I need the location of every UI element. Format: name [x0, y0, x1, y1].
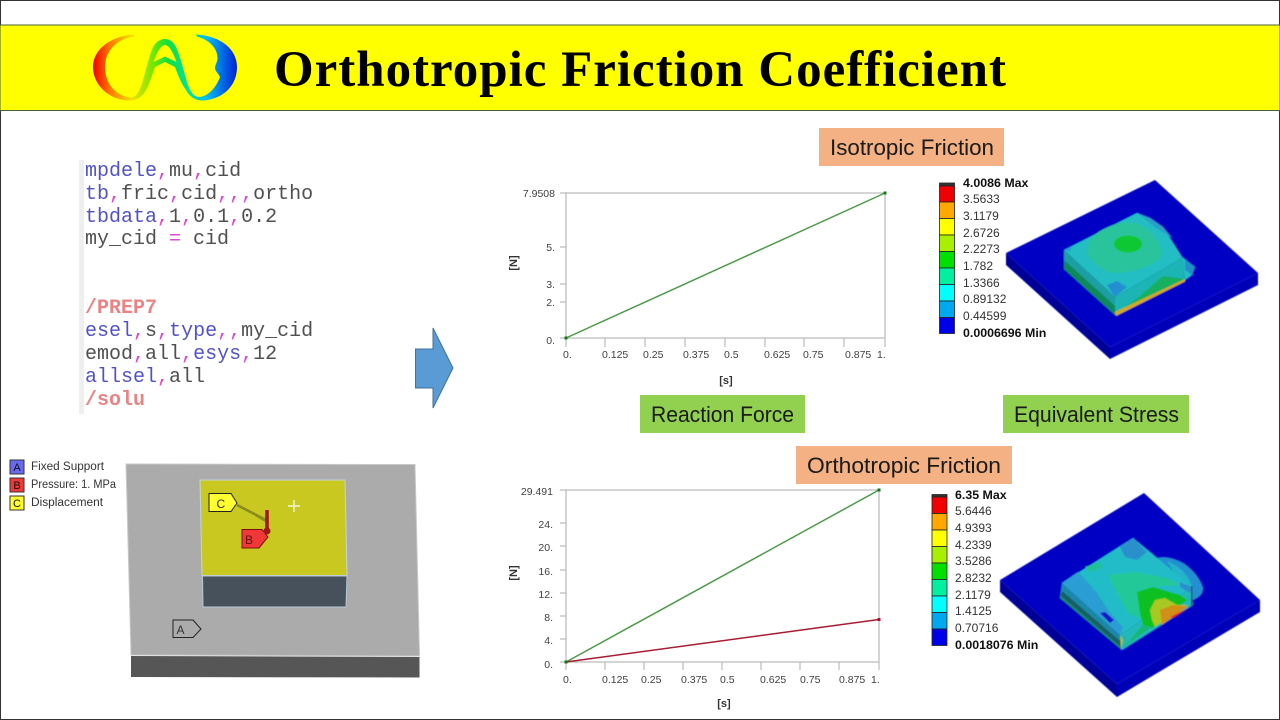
color legend: isotropic stress: 1.3366 [963, 276, 1000, 290]
code line 6: esel,s,type,,my_cid [85, 320, 313, 343]
label: reaction force: Reaction Force [651, 402, 794, 427]
y axis labels: 24. [538, 519, 553, 531]
code line 3: tbdata,1,0.1,0.2 [85, 206, 277, 229]
y axis labels: 12. [538, 589, 553, 601]
y axis labels: 3. [546, 279, 555, 291]
code line 4: my_cid = cid [85, 228, 229, 251]
code line 1: mpdele,mu,cid [85, 160, 241, 183]
y axis labels: 4. [544, 635, 553, 647]
legend: boundary conditions: Pressure: 1. MPa [31, 479, 117, 491]
y axis labels: 5. [546, 242, 555, 254]
color legend: isotropic stress: 0.0006696 Min [963, 326, 1046, 340]
x axis labels: 0.875 [845, 349, 871, 361]
color legend: orthotropic stress: 6.35 Max [955, 488, 1007, 502]
y axis labels [523, 188, 555, 347]
legend: boundary conditions: C [13, 498, 21, 510]
contour plot: isotropic equivalent stress [1006, 180, 1258, 359]
color legend: isotropic stress: 1.782 [963, 259, 993, 273]
legend: boundary conditions: Displacement [31, 497, 104, 509]
logo [93, 34, 237, 100]
x axis labels: 0.75 [803, 349, 824, 361]
color legend: isotropic stress: 2.2273 [963, 242, 1000, 256]
y axis labels: 0. [546, 335, 555, 347]
x axis title: [s] [719, 375, 733, 387]
x axis labels: 0.375 [683, 349, 709, 361]
x axis labels: 0.375 [681, 674, 707, 686]
code line 8: allsel,all [85, 366, 205, 389]
chart: reaction force isotropic [508, 188, 886, 387]
label: equivalent stress: Equivalent Stress [1014, 402, 1179, 427]
color legend: orthotropic stress: 0.70716 [955, 621, 999, 635]
y axis labels: 20. [538, 542, 553, 554]
legend: boundary conditions: B [13, 480, 21, 492]
color legend: orthotropic stress: 3.5286 [955, 554, 992, 568]
color legend: isotropic stress [940, 176, 1046, 340]
color legend: orthotropic stress: 0.0018076 Min [955, 638, 1038, 652]
y axis labels: 16. [538, 566, 553, 578]
x axis labels: 1. [877, 349, 886, 361]
label: equivalent stress [1003, 395, 1189, 433]
x axis labels: 0. [563, 674, 572, 686]
red data line [566, 620, 879, 662]
color legend: orthotropic stress: 4.2339 [955, 538, 992, 552]
model: plate and block with loads [126, 464, 420, 678]
icon: plus marker [288, 500, 300, 512]
panel: APDL code [79, 160, 313, 414]
tag: C displacement: C [216, 497, 226, 511]
x axis labels: 0. [563, 349, 572, 361]
x axis labels: 0.625 [764, 349, 790, 361]
legend: boundary conditions: A [13, 462, 21, 474]
chart: reaction force orthotropic [508, 486, 880, 710]
label: isotropic friction [819, 128, 1004, 166]
x axis labels: 0.75 [800, 674, 821, 686]
title: Orthotropic Friction Coefficient [274, 42, 1006, 98]
y axis labels: 29.491 [521, 486, 553, 498]
y axis labels [521, 486, 553, 671]
color legend: isotropic stress: 3.5633 [963, 192, 1000, 206]
x axis labels: 0.25 [641, 674, 662, 686]
tag: A fixed support [173, 620, 201, 638]
code line 7: emod,all,esys,12 [85, 343, 277, 366]
y axis labels: 0. [544, 659, 553, 671]
label: orthotropic friction [796, 446, 1012, 484]
color legend: isotropic stress: 4.0086 Max [963, 176, 1029, 190]
legend: boundary conditions: Fixed Support [31, 461, 105, 473]
tag: B pressure [242, 510, 270, 548]
tag: A fixed support: A [176, 623, 185, 637]
label: orthotropic friction: Orthotropic Friction [807, 453, 1001, 478]
x axis labels: 0.125 [602, 349, 628, 361]
x axis labels [563, 349, 886, 361]
x axis labels [563, 674, 880, 686]
y axis title: [N] [508, 565, 520, 581]
x axis labels: 0.5 [724, 349, 739, 361]
legend: boundary conditions [10, 460, 117, 510]
label: isotropic friction: Isotropic Friction [830, 135, 994, 160]
color legend: isotropic stress: 0.44599 [963, 309, 1007, 323]
y axis labels: 2. [546, 297, 555, 309]
code line 9: /solu [85, 389, 145, 412]
tag: B pressure: B [245, 533, 253, 547]
color legend: isotropic stress: 0.89132 [963, 292, 1007, 306]
color legend: orthotropic stress: 2.1179 [955, 588, 991, 602]
x axis labels: 0.875 [839, 674, 865, 686]
x axis title: [s] [717, 698, 731, 710]
x axis labels: 0.125 [602, 674, 628, 686]
x axis labels: 1. [871, 674, 880, 686]
x axis labels: 0.625 [760, 674, 786, 686]
header band [0, 25, 1280, 110]
x axis labels: 0.5 [720, 674, 735, 686]
color legend: isotropic stress: 3.1179 [963, 209, 999, 223]
arrow: code to results [416, 328, 453, 408]
color legend: orthotropic stress: 4.9393 [955, 521, 992, 535]
color legend: orthotropic stress: 5.6446 [955, 504, 992, 518]
color legend: orthotropic stress: 2.8232 [955, 571, 992, 585]
tag: C displacement [209, 494, 266, 522]
data line [566, 193, 885, 338]
label: reaction force [640, 395, 805, 433]
color legend: orthotropic stress: 1.4125 [955, 604, 992, 618]
x axis labels: 0.25 [643, 349, 664, 361]
color legend: orthotropic stress [932, 488, 1038, 652]
code line 2: tb,fric,cid,,,ortho [85, 183, 313, 206]
green data line [566, 490, 879, 662]
y axis title: [N] [508, 255, 520, 271]
y axis labels: 7.9508 [523, 188, 555, 200]
code line 5: /PREP7 [85, 297, 157, 320]
y axis labels: 8. [544, 612, 553, 624]
contour plot: orthotropic equivalent stress [1000, 493, 1260, 697]
color legend: isotropic stress: 2.6726 [963, 226, 1000, 240]
